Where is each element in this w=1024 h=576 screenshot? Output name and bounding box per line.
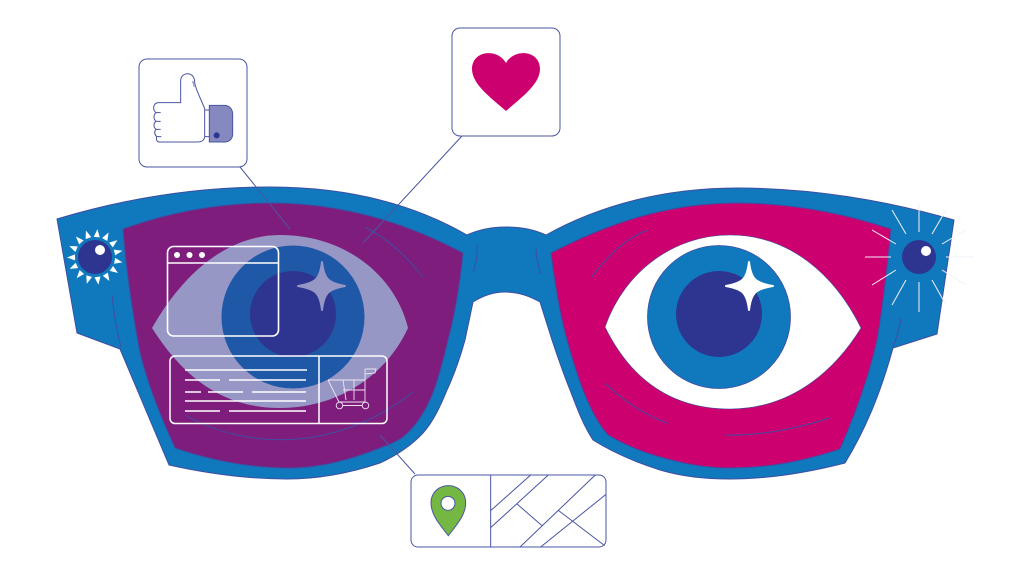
thumbs up box [139, 59, 247, 167]
shopping advert panel [170, 356, 387, 424]
left eye white [152, 235, 408, 408]
left lens [123, 203, 463, 468]
left sparkle [298, 262, 345, 310]
connector lines [240, 136, 462, 474]
left eye seen through lens [152, 235, 408, 408]
browser window icon [168, 246, 278, 336]
map streets [491, 475, 606, 547]
right lens [551, 203, 891, 468]
right iris [648, 246, 790, 388]
right eye white [605, 235, 861, 409]
spikes [67, 229, 123, 285]
left iris [222, 246, 364, 388]
shopping cart icon [328, 369, 376, 409]
glasses frame [57, 187, 954, 479]
frame and lens crease lines [112, 227, 901, 440]
small right temple eye with rays [865, 203, 974, 312]
map location box [411, 475, 606, 547]
advert text lines [185, 370, 307, 411]
icon: thumbs up [154, 74, 233, 142]
right eye [605, 235, 861, 409]
left pupil [250, 271, 336, 357]
heart box [452, 28, 560, 136]
icon: map pin [431, 486, 466, 536]
icon: heart [472, 53, 540, 111]
rays on frame [865, 203, 974, 312]
right pupil [676, 271, 762, 357]
small left temple eye [67, 229, 123, 285]
right sparkle [726, 262, 773, 310]
